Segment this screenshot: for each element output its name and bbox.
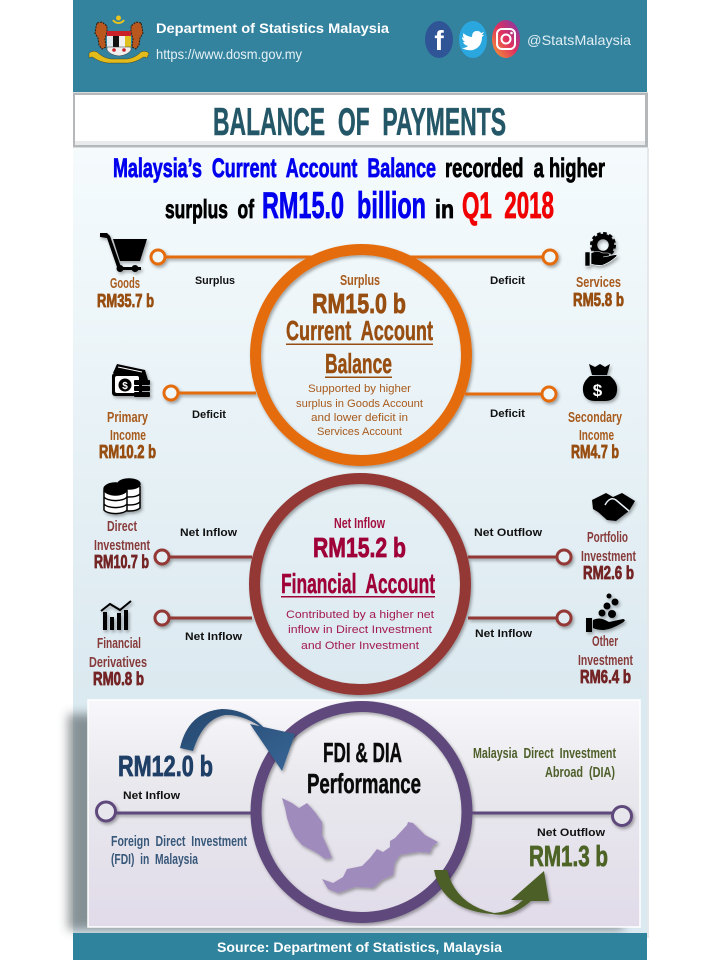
circle text: current account: Surplus bbox=[340, 272, 380, 289]
FDI description: (FDI) in Malaysia bbox=[111, 851, 198, 868]
icon: coins over hand bbox=[586, 594, 625, 632]
icon: Malaysia coat of arms bbox=[89, 16, 149, 63]
primary income item bbox=[99, 409, 156, 462]
portfolio investment item bbox=[581, 529, 636, 583]
circle text: current account: and lower deficit in bbox=[311, 412, 408, 424]
circle heading: Performance bbox=[307, 768, 421, 799]
other investment item bbox=[578, 633, 633, 687]
services item: Services bbox=[576, 274, 621, 291]
panel shadow bbox=[68, 714, 623, 930]
icon: money bag bbox=[583, 364, 617, 401]
primary income item: Income bbox=[110, 427, 146, 444]
label: net outflow: Net Outflow bbox=[474, 527, 542, 539]
circle text: current account: Supported by higher bbox=[308, 383, 411, 395]
circle text: financial account: Financial Account bbox=[281, 568, 435, 599]
FDI description: Foreign Direct Investment bbox=[111, 833, 247, 850]
financial derivatives item: Financial bbox=[97, 635, 141, 652]
icon: money bag: $ bbox=[593, 381, 603, 400]
portfolio investment item: Investment bbox=[581, 548, 636, 565]
circle text: financial account bbox=[281, 515, 435, 652]
circle text: current account: RM15.0 b bbox=[312, 288, 406, 319]
headline statement: in bbox=[435, 194, 454, 224]
circle text: financial account: and Other Investment bbox=[301, 640, 419, 652]
icon: facebook: f bbox=[434, 25, 444, 56]
label: net inflow: Net Inflow bbox=[475, 628, 532, 640]
DIA description: Malaysia Direct Investment bbox=[473, 745, 616, 762]
circle text: current account bbox=[286, 272, 433, 438]
other investment item: RM6.4 b bbox=[580, 667, 631, 687]
circle heading: FDI & DIA bbox=[323, 737, 402, 768]
arrow: FDI into Malaysia bbox=[180, 709, 295, 771]
FDI value: RM12.0 b bbox=[118, 751, 213, 783]
DIA description bbox=[473, 745, 616, 781]
portfolio investment item: Portfolio bbox=[587, 529, 628, 546]
financial derivatives item: Derivatives bbox=[89, 654, 147, 671]
circle heading bbox=[307, 737, 421, 799]
label: net inflow: Net Inflow bbox=[123, 790, 180, 802]
headline statement bbox=[113, 153, 605, 226]
secondary income item: RM4.7 b bbox=[571, 442, 619, 462]
direct investment item: Investment bbox=[94, 537, 150, 554]
circle text: current account: Current Account bbox=[286, 315, 433, 346]
icon: banknotes: $ bbox=[122, 381, 128, 392]
icon: handshake bbox=[592, 493, 635, 521]
footer band bbox=[73, 933, 647, 960]
title: BALANCE OF PAYMENTS bbox=[213, 101, 506, 144]
organisation name: Department of Statistics Malaysia bbox=[156, 20, 389, 36]
connector lines bbox=[155, 478, 571, 690]
social handle: @StatsMalaysia bbox=[527, 32, 631, 48]
circle text: financial account: RM15.2 b bbox=[313, 532, 406, 563]
headline statement: surplus of bbox=[165, 194, 254, 224]
circle text: financial account: inflow in Direct Investment bbox=[288, 624, 432, 636]
label: surplus: Surplus bbox=[195, 275, 235, 287]
title banner bbox=[73, 92, 648, 148]
icon: banknotes bbox=[112, 364, 150, 397]
other investment item: Investment bbox=[578, 652, 633, 669]
DIA value: RM1.3 b bbox=[529, 841, 608, 873]
direct investment item: Direct bbox=[107, 518, 137, 535]
circle text: financial account: Contributed by a higher net bbox=[286, 609, 434, 621]
secondary income item: Income bbox=[579, 427, 614, 444]
icon: bar chart with trend line bbox=[101, 601, 131, 630]
label: net inflow: Net Inflow bbox=[185, 631, 242, 643]
goods item: Goods bbox=[110, 275, 140, 292]
label: deficit: Deficit bbox=[490, 275, 525, 287]
circle text: current account: surplus in Goods Account bbox=[296, 398, 423, 410]
headline statement: recorded a higher bbox=[445, 153, 605, 183]
financial derivatives item: RM0.8 b bbox=[93, 669, 144, 689]
icon: coin stacks bbox=[104, 479, 140, 514]
page column background bbox=[73, 148, 649, 938]
label: net outflow: Net Outflow bbox=[537, 827, 605, 839]
headline statement: Q1 2018 bbox=[462, 185, 554, 226]
icon: facebook bbox=[425, 21, 453, 58]
icon: gear and hand bbox=[585, 234, 617, 266]
FDI description bbox=[111, 833, 247, 868]
header band bbox=[73, 0, 647, 92]
secondary income item bbox=[568, 409, 622, 462]
secondary income item: Secondary bbox=[568, 409, 622, 426]
map of Malaysia bbox=[282, 798, 438, 893]
icon: twitter bbox=[459, 21, 487, 58]
services item bbox=[573, 274, 624, 310]
portfolio investment item: RM2.6 b bbox=[583, 563, 634, 583]
source note: Source: Department of Statistics, Malaysia bbox=[217, 940, 503, 955]
direct investment item: RM10.7 b bbox=[94, 552, 149, 572]
panel: current account balance bbox=[97, 233, 624, 462]
circle text: financial account: Net Inflow bbox=[334, 515, 385, 532]
primary income item: RM10.2 b bbox=[99, 442, 156, 462]
arrow: DIA outward bbox=[434, 870, 549, 915]
label: deficit: Deficit bbox=[490, 408, 525, 420]
other investment item: Other bbox=[592, 633, 618, 650]
headline statement: RM15.0 billion bbox=[262, 185, 426, 226]
label: net inflow: Net Inflow bbox=[180, 527, 237, 539]
DIA description: Abroad (DIA) bbox=[545, 764, 615, 781]
panel: financial account bbox=[89, 478, 636, 690]
circle text: current account: Balance bbox=[325, 348, 392, 379]
website: https://www.dosm.gov.my bbox=[156, 46, 302, 62]
connector lines bbox=[96, 706, 632, 918]
connector lines bbox=[151, 250, 557, 460]
icon: shopping cart bbox=[100, 233, 147, 272]
label: deficit: Deficit bbox=[192, 409, 226, 421]
circle text: current account: Services Account bbox=[317, 426, 402, 438]
services item: RM5.8 b bbox=[573, 290, 624, 310]
icon: instagram bbox=[492, 20, 520, 58]
direct investment item bbox=[94, 518, 150, 572]
primary income item: Primary bbox=[107, 409, 148, 426]
goods item bbox=[97, 275, 154, 311]
goods item: RM35.7 b bbox=[97, 291, 154, 311]
financial derivatives item bbox=[89, 635, 147, 689]
panel card bbox=[88, 700, 640, 927]
headline statement: Malaysia’s Current Account Balance bbox=[113, 153, 436, 183]
panel: FDI and DIA performance bbox=[68, 700, 640, 930]
